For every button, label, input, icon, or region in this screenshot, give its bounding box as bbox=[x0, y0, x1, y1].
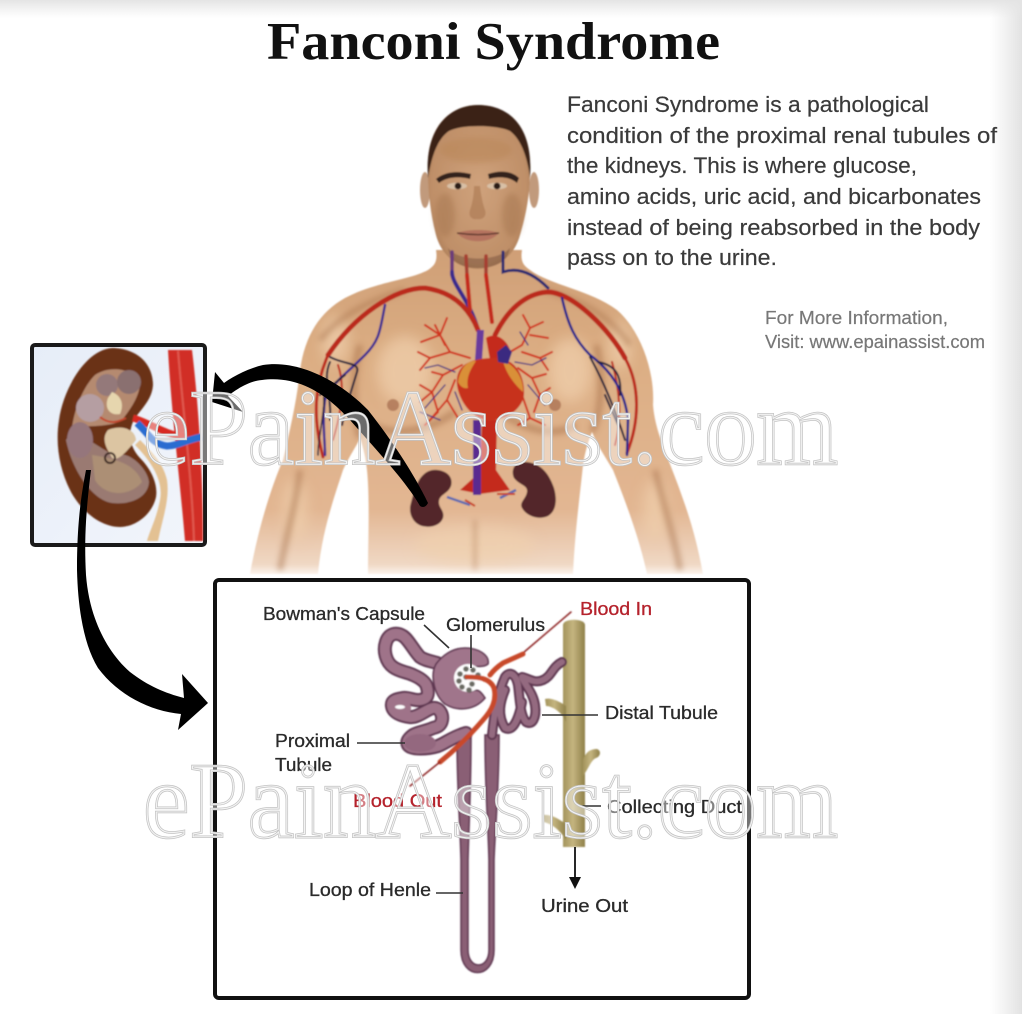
distal tubule bbox=[492, 662, 562, 735]
arrow: close-up to nephron bbox=[77, 470, 208, 730]
loop of Henle bbox=[457, 735, 499, 972]
glomerulus bbox=[454, 664, 482, 693]
ureter bbox=[135, 440, 168, 541]
kidney cortex lower bbox=[66, 435, 149, 503]
watermark: lower: ePainAssist.com bbox=[143, 742, 838, 861]
kidneys bbox=[410, 462, 556, 527]
kidney sinus upper bbox=[72, 369, 140, 428]
label: Proximal Tubule: Proximal bbox=[275, 731, 350, 751]
watermark: upper: ePainAssist.com bbox=[143, 369, 838, 488]
panel: nephron diagram bbox=[215, 580, 749, 998]
watermark: upper: ePainAssist.com bbox=[143, 369, 838, 488]
label: Loop of Henle: Loop of Henle bbox=[309, 880, 431, 900]
human figure illustration bbox=[250, 105, 703, 574]
arrow: body kidney to close-up bbox=[212, 364, 428, 507]
text block: description bbox=[567, 92, 998, 270]
text block: more information: For More Information, bbox=[765, 308, 948, 328]
arrow: urine out bbox=[569, 847, 581, 889]
heart bbox=[457, 336, 524, 421]
label: Distal Tubule: Distal Tubule bbox=[605, 703, 718, 723]
nephron illustration bbox=[385, 612, 600, 972]
proximal tubule bbox=[385, 634, 466, 752]
label: Collecting Duct: Collecting Duct bbox=[607, 797, 742, 817]
hair bbox=[428, 105, 530, 178]
torso and arms bbox=[250, 250, 703, 574]
text block: description: Fanconi Syndrome is a pathological bbox=[567, 92, 929, 117]
text block: more information bbox=[765, 308, 985, 352]
pyramids bbox=[96, 374, 118, 396]
lung vessels left bbox=[418, 318, 470, 425]
label: Blood Out: Blood Out bbox=[353, 791, 442, 811]
lung vessels right bbox=[510, 315, 552, 425]
Bowman's capsule bbox=[433, 648, 488, 709]
stubble shadow bbox=[448, 248, 510, 268]
skin highlights and muscle shading bbox=[280, 290, 680, 570]
renal artery and vein bbox=[133, 418, 186, 437]
nipples bbox=[387, 399, 561, 411]
text block: description: amino acids, uric acid, and bicarbonates bbox=[567, 184, 981, 209]
neck vessels bbox=[450, 252, 454, 275]
text block: description: the kidneys. This is where glucose, bbox=[567, 153, 917, 178]
veins bbox=[324, 305, 385, 455]
text block: more information: Visit: www.epainassist.com bbox=[765, 332, 985, 352]
eyes bbox=[447, 183, 467, 189]
label: Glomerulus: Glomerulus bbox=[446, 615, 545, 635]
label: Proximal Tubule: Tubule bbox=[275, 755, 332, 775]
aorta and vena cava bbox=[447, 330, 516, 506]
text block: description: pass on to the urine. bbox=[567, 245, 777, 270]
muscle band bbox=[168, 350, 203, 541]
eyebrows bbox=[436, 172, 471, 183]
title: Fanconi Syndrome bbox=[267, 13, 720, 71]
panel: kidney close-up bbox=[32, 345, 205, 545]
forehead tone bbox=[440, 137, 512, 163]
arteries bbox=[328, 288, 478, 355]
label: Blood In: Blood In bbox=[580, 599, 652, 619]
circulatory system bbox=[316, 252, 637, 457]
collecting duct bbox=[543, 620, 600, 847]
text block: description: condition of the proximal renal tubules of bbox=[567, 123, 998, 148]
watermark: lower: ePainAssist.com bbox=[143, 742, 838, 861]
label: Bowman's Capsule: Bowman's Capsule bbox=[263, 604, 425, 624]
mouth bbox=[457, 230, 499, 241]
label: Proximal Tubule bbox=[275, 731, 350, 775]
head bbox=[420, 105, 539, 269]
text block: description: instead of being reabsorbed in the body bbox=[567, 215, 980, 240]
blood vessels bbox=[410, 612, 571, 786]
leader lines bbox=[357, 625, 601, 893]
nose bbox=[469, 186, 486, 219]
kidney outer bbox=[58, 348, 156, 527]
label: Urine Out: Urine Out bbox=[541, 896, 628, 916]
